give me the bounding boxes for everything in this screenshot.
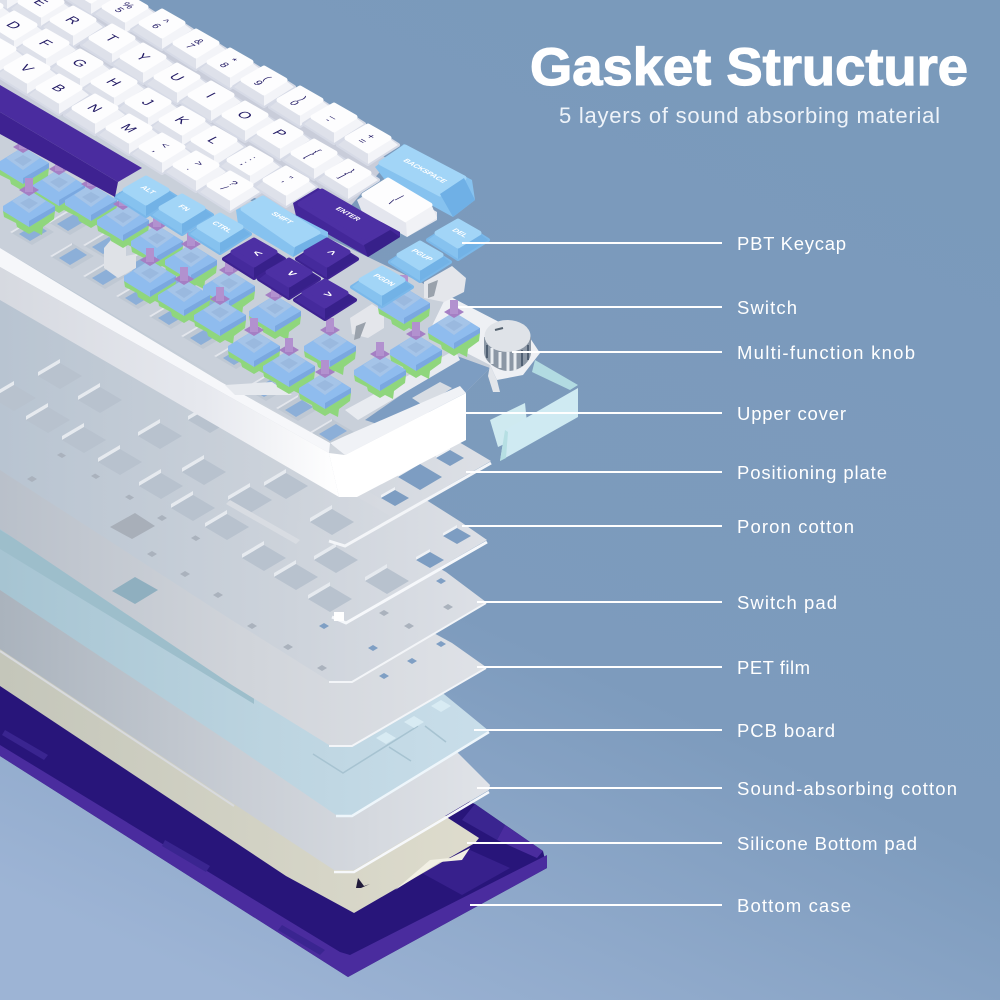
key: pgdn [352,268,412,306]
label: PET film: PET film [737,657,810,678]
white alpha keys: ; [237,160,250,167]
cover knob block [430,295,540,380]
white alpha keys: M [117,122,141,134]
key: arrow keys: < [248,248,267,258]
white alpha keys: 5 [111,6,126,14]
white alpha keys: L [204,134,225,146]
white alpha keys: * [226,57,239,64]
purple space bar [0,85,142,197]
white alpha keys: . [183,165,196,172]
white alpha keys: [ [301,153,314,160]
key: arrow keys: > [319,289,338,299]
key: arrow keys [224,240,357,319]
layer: upper cover [0,80,540,497]
white alpha keys: I [202,90,220,100]
key: backspace: BACKSPACE [401,158,450,184]
key: backslash [357,180,437,237]
cover interior [0,80,490,450]
layer: sound-absorbing cotton [0,530,490,872]
white alpha keys: = [354,137,369,145]
label: PCB board: PCB board [737,720,835,741]
label: Sound-absorbing cotton: Sound-absorbing cotton [737,778,957,799]
white alpha keys: 9 [250,79,265,87]
white alpha keys [0,0,398,211]
white alpha keys: J [138,97,158,107]
cover top rim [0,248,330,453]
white alpha keys: O [233,109,257,121]
white alpha keys: > [191,160,206,168]
key: arrow keys: v [283,268,302,278]
white alpha keys: P [269,127,291,139]
layer: PET film [0,420,486,746]
white alpha keys: ? [225,180,240,188]
white alpha keys: H [103,76,126,88]
white alpha keys: V [16,62,39,74]
key: enter: ENTER [333,206,364,222]
white alpha keys: & [190,38,206,46]
layer: poron cotton [0,280,487,623]
white alpha keys: : [246,156,258,162]
label: Silicone Bottom pad: Silicone Bottom pad [737,833,917,854]
key: backslash: \ [384,199,397,206]
key: enter [293,188,400,257]
keycaps: PBT Keycap set [0,0,488,319]
leader lines [458,243,722,905]
label: Switch: Switch [737,297,797,318]
cover front face [0,267,339,497]
key: del [428,221,488,259]
stabilizer blocks [104,234,466,340]
white alpha keys: T [101,32,123,44]
white alpha keys: _ [328,111,344,120]
white alpha keys: < [157,142,172,150]
key: pgup: PGUP [409,248,435,262]
key: del: DEL [450,227,471,239]
key: alt / fn / ctrl: ALT [138,184,159,196]
label: PBT Keycap: PBT Keycap [737,233,846,254]
white alpha keys: N [84,102,107,114]
white alpha keys: R [62,14,85,26]
title: Gasket Structure [530,38,968,97]
key: alt / fn / ctrl: CTRL [210,220,235,234]
white alpha keys: - [321,117,334,124]
icon: multi-function knob [484,320,531,371]
label: Upper cover: Upper cover [737,403,846,424]
layer: positioning plate [0,200,491,546]
white alpha keys: 7 [182,42,197,50]
white alpha keys: Y [132,51,154,63]
layer: switch pad [0,360,486,682]
white alpha keys: G [68,57,92,69]
layer: PCB board [0,480,489,816]
white alpha keys: } [344,169,357,175]
white alpha keys: B [48,82,70,94]
layer: silicone bottom pad [0,590,479,913]
white alpha keys: ( [260,76,273,82]
subtitle: 5 layers of sound absorbing material [559,103,940,128]
white alpha keys: { [310,149,323,155]
white alpha keys: U [166,71,189,83]
key: shift [236,197,328,257]
white alpha keys: ) [296,96,309,102]
label: Positioning plate: Positioning plate [737,462,887,483]
switches [0,135,480,417]
key: pgup [390,243,450,281]
layer: bottom case [0,600,547,977]
white alpha keys: ] [335,173,348,180]
key: backslash: | [393,195,405,201]
label: Poron cotton: Poron cotton [737,516,854,537]
label: Multi-function knob: Multi-function knob [737,342,915,363]
label: Switch pad: Switch pad [737,592,837,613]
label: Bottom case: Bottom case [737,895,851,916]
white alpha keys: + [363,133,378,141]
white alpha keys: F [35,37,57,49]
white alpha keys: " [282,175,295,182]
key: alt / fn / ctrl [116,178,250,253]
key: shift: SHIFT [269,211,296,225]
white alpha keys: D [3,19,26,31]
white alpha keys: K [171,114,194,126]
white alpha keys: 6 [148,22,163,30]
side cover piece [490,360,578,461]
key: alt / fn / ctrl: FN [176,203,193,212]
white alpha keys: / [217,185,230,192]
white alpha keys: ' [274,180,285,186]
key: pgdn: PGDN [371,273,398,287]
cover right end: open window [365,356,490,430]
key: backspace [375,144,475,217]
white alpha keys: , [149,147,162,154]
white alpha keys: ^ [157,18,171,26]
white alpha keys: 0 [286,99,301,107]
key: arrow keys: ^ [321,248,340,258]
white alpha keys: 8 [216,61,231,69]
white alpha keys: % [118,1,136,11]
